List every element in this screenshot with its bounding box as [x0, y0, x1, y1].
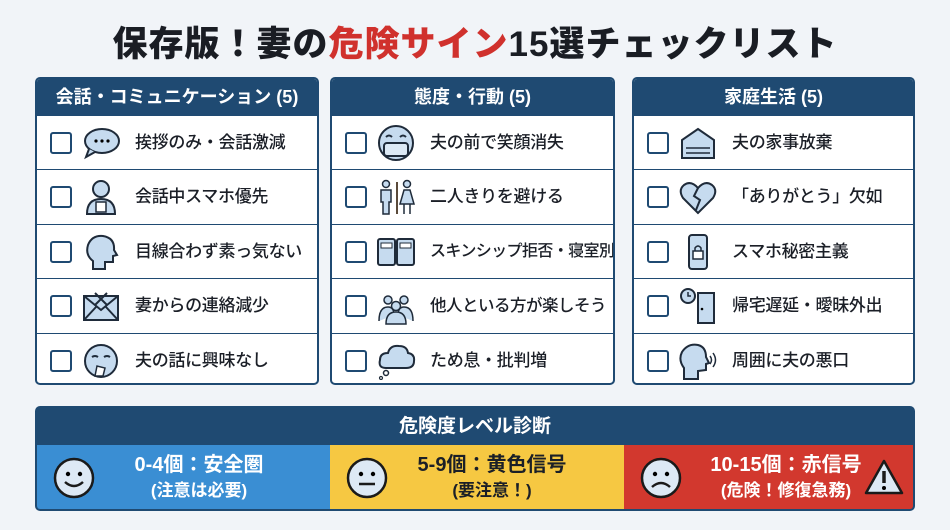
item 13 — [634, 224, 913, 278]
item 8: スキンシップ拒否・寝室別 — [430, 243, 614, 260]
item 3: 目線合わず素っ気ない — [135, 242, 302, 261]
panel header: 家庭生活 (5) — [724, 87, 823, 107]
item 14: 帰宅遅延・曖昧外出 — [732, 296, 882, 315]
level: danger: 10-15個：赤信号 — [710, 454, 862, 476]
item 1 — [37, 115, 317, 169]
panel header — [37, 79, 317, 115]
item 10 — [332, 333, 613, 387]
item 13: スマホ秘密主義 — [732, 242, 848, 261]
item 4 — [37, 278, 317, 333]
panel: conversation — [35, 77, 319, 385]
panel: danger level — [35, 406, 915, 511]
title: 保存版！妻の危険サイン15選チェックリスト — [113, 25, 837, 64]
item 7: 二人きりを避ける — [430, 187, 564, 206]
level: danger — [624, 445, 917, 511]
item 3 — [37, 224, 317, 278]
item 9 — [332, 278, 613, 333]
item 5 — [37, 333, 317, 387]
level: caution — [330, 445, 624, 511]
item 7 — [332, 169, 613, 224]
item 8 — [332, 224, 613, 278]
item 15 — [634, 333, 913, 387]
item 11: 夫の家事放棄 — [732, 133, 832, 152]
item 6: 夫の前で笑顔消失 — [430, 133, 564, 152]
item 1: 挨拶のみ・会話激減 — [135, 133, 285, 152]
level: safe: (注意は必要) — [151, 481, 247, 500]
level: caution: (要注意！) — [452, 481, 532, 500]
icon: warning — [864, 460, 904, 494]
item 14 — [634, 278, 913, 333]
item 6 — [332, 115, 613, 169]
panel: home life — [632, 77, 915, 385]
item 2: 会話中スマホ優先 — [135, 187, 268, 206]
panel header: 会話・コミュニケーション (5) — [56, 87, 298, 107]
level: caution: 5-9個：黄色信号 — [418, 454, 566, 476]
level: safe — [37, 445, 330, 511]
panel header: 態度・行動 (5) — [414, 87, 531, 107]
panel header — [634, 79, 913, 115]
item 15: 周囲に夫の悪口 — [732, 351, 849, 370]
level: danger: (危険！修復急務) — [721, 481, 851, 500]
item 5: 夫の話に興味なし — [135, 351, 269, 370]
item 12 — [634, 169, 913, 224]
level: safe: 0-4個：安全圏 — [135, 454, 263, 476]
item 10: ため息・批判増 — [430, 351, 547, 370]
item 9: 他人といる方が楽しそう — [430, 297, 606, 315]
level header: 危険度レベル診断 — [399, 416, 551, 437]
item 4: 妻からの連絡減少 — [135, 296, 269, 315]
item 2 — [37, 169, 317, 224]
panel: attitude — [330, 77, 615, 385]
item 11 — [634, 115, 913, 169]
panel header — [332, 79, 613, 115]
item 12: 「ありがとう」欠如 — [732, 187, 882, 206]
